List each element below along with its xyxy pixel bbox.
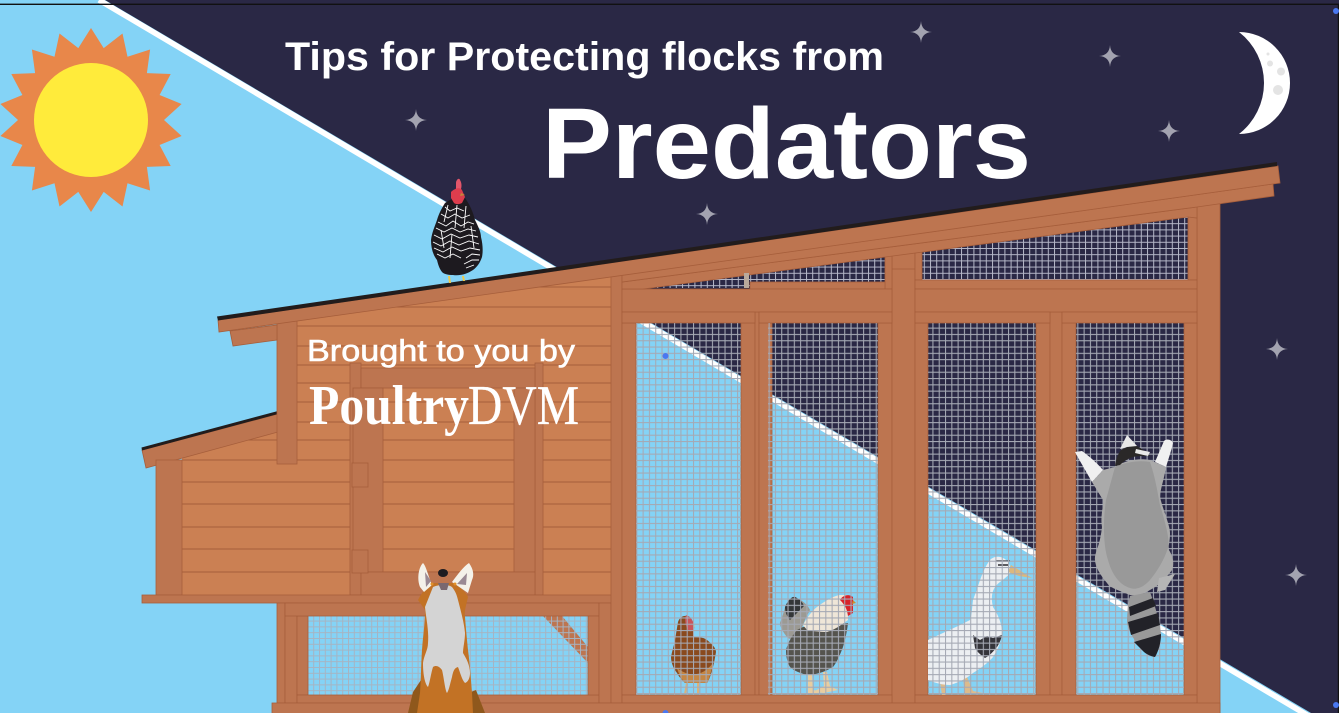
coop: under-run mesh (308, 616, 588, 695)
coop: upper left post (277, 318, 297, 464)
run mesh panels (636, 323, 1184, 695)
coop: left roof tier (230, 325, 277, 346)
title: Predators: Predators (542, 88, 1031, 200)
icon: crescent moon (1239, 32, 1290, 134)
selection handles (662, 8, 1339, 713)
coop: lower roof (142, 411, 278, 468)
coop: under-run ramp (543, 616, 588, 663)
logo: PoultryDVM (309, 375, 579, 437)
coop: under-run frame (277, 603, 611, 703)
duck (928, 557, 1032, 695)
top frame line (0, 4, 1339, 5)
coop: base board (272, 703, 1220, 713)
logo: PoultryDVM: Poultry (309, 375, 469, 437)
coop: floor board (142, 595, 622, 603)
title: subtitle line: Tips for Protecting flocks from (285, 35, 884, 79)
mesh ghost on beam (744, 273, 749, 288)
icon: sun (0, 28, 182, 212)
coop: main roof (218, 166, 1280, 332)
coop: roof support strip (622, 207, 1197, 289)
fox (408, 563, 485, 713)
coop: nest box door (350, 363, 543, 595)
coop: run frame (611, 208, 1197, 703)
barred hen on roof (431, 179, 483, 283)
coop: right roof tier (622, 184, 1274, 282)
coop: right post (1197, 198, 1220, 713)
right frame line (1338, 4, 1339, 713)
brown hen (671, 615, 716, 694)
rooster (780, 595, 856, 694)
coop: left corner post (156, 460, 182, 595)
raccoon (1075, 435, 1175, 657)
coop: roof shingle edge (217, 162, 1277, 320)
chicken coop (142, 162, 1280, 713)
text: brought to you by: Brought to you by (307, 333, 576, 368)
icon: stars (405, 21, 1307, 586)
coop: run top mesh (643, 217, 1188, 288)
logo: PoultryDVM: DVM (468, 375, 579, 437)
coop: siding (182, 277, 611, 595)
coop: mid post joint line (892, 268, 915, 270)
